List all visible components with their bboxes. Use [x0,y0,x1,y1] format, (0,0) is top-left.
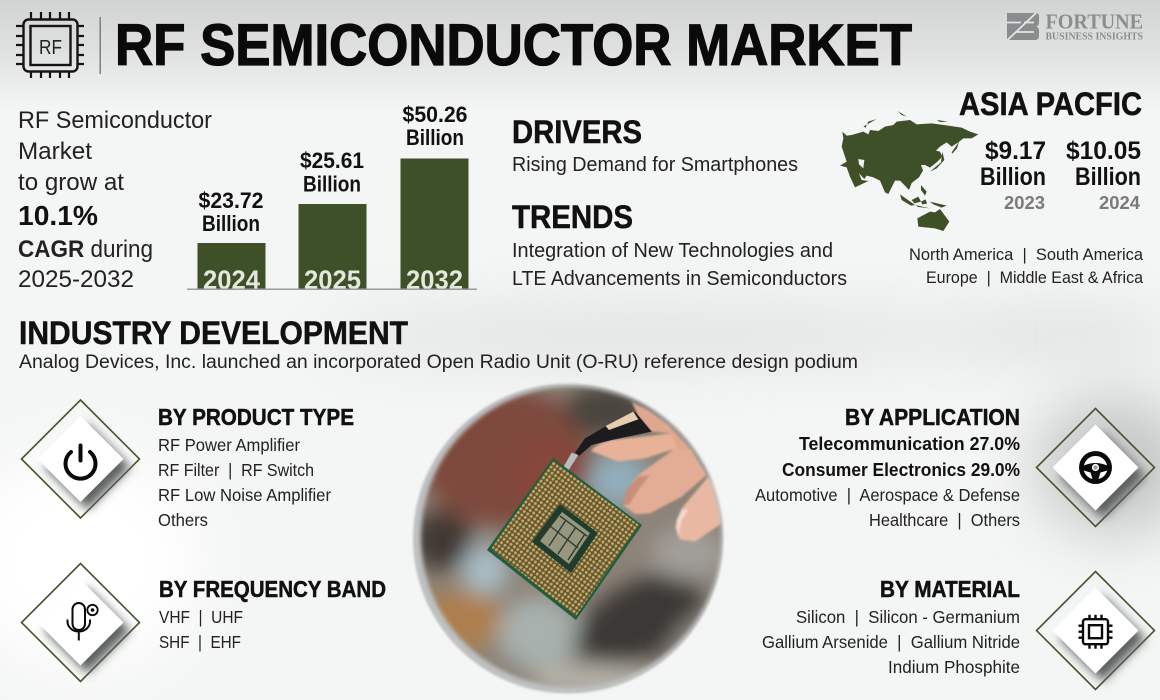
diamond icon: power [22,400,140,518]
market summary text: 10.1% [18,200,98,231]
by product type: RF Power Amplifier [158,435,300,455]
value 2024: $10.05 [1066,137,1141,165]
bar 2024 [198,188,266,295]
bar 2032: 2032 [406,265,463,295]
trends [512,199,847,290]
diamond icon: microphone [22,564,140,682]
market summary text: to grow at [18,169,124,196]
by frequency band: VHF | UHF [159,607,243,627]
drivers: DRIVERS [512,114,642,150]
bar 2025: $25.61 [300,148,364,173]
by application: Telecommunication 27.0% [799,434,1020,454]
diamond icon: steering wheel [1036,408,1154,526]
by product type: RF Low Noise Amplifier [158,485,331,505]
title: RF SEMICONDUCTOR MARKET [115,13,912,78]
drivers [512,114,798,176]
value 2024 [1066,137,1141,213]
industry development: Analog Devices, Inc. launched an incorporated Open Radio Unit (O-RU) reference design podium [19,352,858,373]
by material: BY MATERIAL [880,576,1020,602]
by application: BY APPLICATION [845,404,1020,430]
bar 2032: Billion [406,125,464,150]
by material [762,576,1020,677]
icon: RF chip [16,12,84,78]
bar 2025: 2025 [304,265,361,295]
value 2023: 2023 [1004,193,1045,213]
bar chart [187,102,477,295]
value 2024: Billion [1075,163,1141,191]
value 2023 [980,137,1046,213]
Asia Pacific heading: ASIA PACFIC [959,86,1142,122]
market summary text: CAGR during [18,236,153,263]
by product type [158,404,354,530]
value 2024: 2024 [1099,193,1140,213]
logo: Fortune Business Insights [1007,10,1143,42]
industry development [19,315,858,373]
bar 2024: 2024 [203,265,260,295]
market summary text [18,107,212,293]
header divider [100,17,101,74]
by product type: Others [158,510,208,530]
trends: LTE Advancements in Semiconductors [512,268,847,290]
industry development: INDUSTRY DEVELOPMENT [19,315,408,351]
bar 2032 [400,102,468,295]
market summary text: RF Semiconductor [18,107,212,134]
by frequency band: SHF | EHF [159,632,241,652]
by material: Gallium Arsenide | Gallium Nitride [762,632,1020,652]
bar 2024: $23.72 [198,188,264,213]
bar 2025: Billion [303,172,361,196]
tweezers [564,412,652,470]
market summary text: Market [18,138,92,165]
bar 2032: $50.26 [402,102,468,127]
cpu chip [487,458,642,620]
by material: Indium Phosphite [888,657,1020,677]
other regions: North America | South America [909,245,1144,264]
value 2023: Billion [980,163,1046,191]
map: Asia Pacific [840,111,978,231]
market summary text: 2025-2032 [18,266,134,293]
icon: RF chip: RF [39,37,62,59]
bar 2024: Billion [202,211,260,236]
logo: Fortune Business Insights: BUSINESS INSIGHTS [1046,32,1143,42]
other regions: Europe | Middle East & Africa [926,268,1144,287]
logo: Fortune Business Insights: FORTUNE [1046,10,1143,34]
by application: Automotive | Aerospace & Defense [755,485,1020,505]
trends: TRENDS [512,199,633,235]
diamond icon: chip [1036,572,1154,690]
trends: Integration of New Technologies and [512,240,833,262]
drivers: Rising Demand for Smartphones [512,154,798,176]
by application: Consumer Electronics 29.0% [782,460,1020,480]
by frequency band [159,576,386,652]
by frequency band: BY FREQUENCY BAND [159,576,386,602]
by application [755,404,1020,530]
by product type: BY PRODUCT TYPE [158,404,354,430]
by application: Healthcare | Others [869,510,1020,530]
value 2023: $9.17 [985,137,1046,165]
photo: chip held by tweezers [412,383,725,697]
by product type: RF Filter | RF Switch [158,460,314,480]
bar 2025 [298,148,366,295]
hand [591,402,722,542]
other regions [909,245,1144,287]
by material: Silicon | Silicon - Germanium [796,607,1020,627]
